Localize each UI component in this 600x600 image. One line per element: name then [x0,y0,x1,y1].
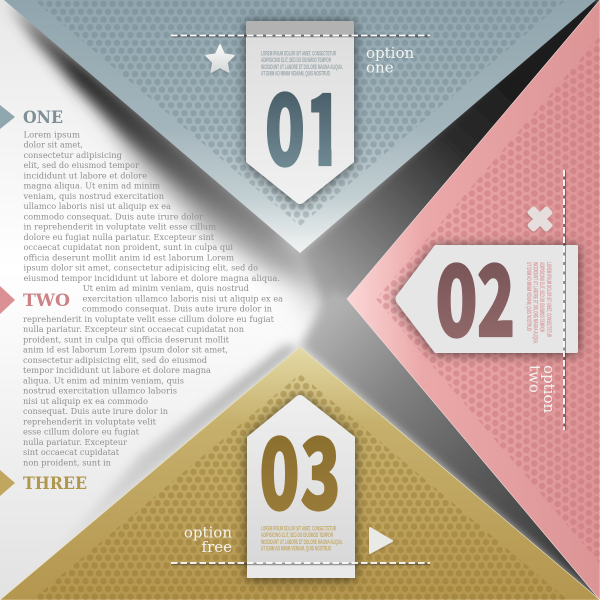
body text block: consequat. Duis aute irure dolor in [23,407,168,417]
body text block: anim id est laborum Lorem ipsum dolor sit amet, [23,346,228,356]
body text block: ipsum dolor sit amet, consectetur adipisicing elit, sed do [24,264,258,274]
tag 02 small text: INCIDIDUNT UT LABORE ET DOLORE MAGNA ALIQUA. [532,262,538,344]
body text block: reprehenderit in voluptate velit [23,417,156,427]
body text block: in reprehenderit in voluptate velit esse cillum [24,222,216,232]
body text block: nulla pariatur. Excepteur sint occaecat cupidatat non [23,325,244,335]
body text block: occaecat cupidatat non proident, sunt in culpa qui [24,243,233,253]
number 03: 0 [260,396,300,538]
tag 03 small text [261,526,343,552]
tag 01 [246,21,354,204]
stitch line: top [171,34,430,37]
icon: play triangle [370,528,392,553]
body text block: eiusmod tempor incididunt ut labore et dolore magna aliqua. [24,274,280,284]
icon: cross [520,199,560,239]
body text block: dolor sit amet, [24,140,83,150]
label: option one: one [366,58,394,76]
tag 02 small text: ADIPISICING ELIT, SED DO EIUSMOD TEMPOR [538,262,544,332]
body text block: commodo consequat. Duis aute irure dolor [24,212,204,222]
body text block: Ut enim ad minim veniam, quis nostrud [83,284,249,294]
body text block: non proident, sunt in [23,458,111,468]
body text block: officia deserunt mollit anim id est laborum Lorem [24,253,234,263]
panel: blue triangle [4,0,596,253]
body text block: sint occaecat cupidatat [23,448,119,458]
body text block: nostrud exercitation ullamco laboris [23,386,178,396]
number 02: 0 [436,223,478,365]
heading: two: TWO [23,291,70,310]
body text block: elit, sed do eiusmod tempor [24,161,140,171]
label: option free: option [184,524,232,542]
body text block: proident, sunt in culpa qui officia deserunt mollit [23,335,229,345]
body text block [23,130,283,468]
marker: three arrow [0,470,15,496]
tag 01 small text [261,52,343,77]
tag 01 small text: ADIPISICING ELIT, SED DO EIUSMOD TEMPOR [261,58,331,64]
icon: star [206,45,234,72]
body text block: exercitation ullamco laboris nisi ut aliquip ex ea [82,294,283,304]
number 02: 2 [477,223,515,365]
marker: one arrow [0,105,15,129]
number 01: 0 [265,52,305,194]
tag 01 small text: UT ENIM AD MINIM VENIAM, QUIS NOSTRUD [261,71,330,77]
number 01 [266,91,332,168]
body text block: magna aliqua. Ut enim ad minim [24,182,160,192]
marker: two arrow [0,286,15,314]
tag 02 small text: LOREM IPSUM DOLOR SIT AMET, CONSECTETUR [545,262,551,337]
body text block: consectetur adipisicing elit, sed do eiusmod [23,356,207,366]
tag 02 [396,223,578,365]
body text block: Lorem ipsum [24,130,80,140]
number 01: 1 [306,52,342,194]
body text block: veniam, quis nostrud exercitation [23,192,164,202]
body text block: ullamco laboris nisi ut aliquip ex ea [24,202,171,212]
tag 03 [247,395,355,578]
body text block: nulla pariatur. Excepteur [23,438,128,448]
body text block: aliqua. Ut enim ad minim veniam, quis [23,376,184,386]
body text block: commodo consequat. Duis aute irure dolor in [82,304,272,314]
label: option free: free [202,538,232,556]
tag 03 small text: LOREM IPSUM DOLOR SIT AMET, CONSECTETUR [261,526,336,532]
body text block: consectetur adipisicing [24,151,122,161]
body text block: nisi ut aliquip ex ea commodo [23,397,148,407]
body text block: reprehenderit in voluptate velit esse cillum dolore eu fugiat [23,315,274,325]
stitch line: bottom [171,563,430,564]
tag 02 small text: UT ENIM AD MINIM VENIAM, QUIS NOSTRUD [525,262,531,331]
stitch line: right [563,170,566,430]
body text block: incididunt ut labore et dolore [24,171,147,181]
panel: gold triangle [0,347,600,600]
body text block: dolore eu fugiat nulla pariatur. Excepteur sint [24,233,214,243]
number 03: 3 [300,396,340,538]
body text block: tempor incididunt ut labore et dolore magna [23,366,211,376]
tag 03 small text: INCIDIDUNT UT LABORE ET DOLORE MAGNA ALIQUA. [261,540,343,546]
panel: pink triangle [347,0,600,600]
tag 01 small text: LOREM IPSUM DOLOR SIT AMET, CONSECTETUR [261,52,336,58]
label: option two: two [526,365,544,393]
label: option one: option [366,44,414,62]
tag 01 small text: INCIDIDUNT UT LABORE ET DOLORE MAGNA ALIQUA. [261,65,343,71]
tag 03 small text: ADIPISICING ELIT, SED DO EIUSMOD TEMPOR [261,533,333,539]
heading: three: THREE [23,474,87,493]
body text block: esse cillum dolore eu fugiat [23,428,139,438]
label: option two: option [540,365,558,413]
label: option two [526,365,558,413]
heading: one: ONE [23,108,63,127]
tag 02 small text [525,262,551,344]
tag 03 small text: UT ENIM AD MINIM VENIAM, QUIS NOSTRUD [261,546,331,552]
